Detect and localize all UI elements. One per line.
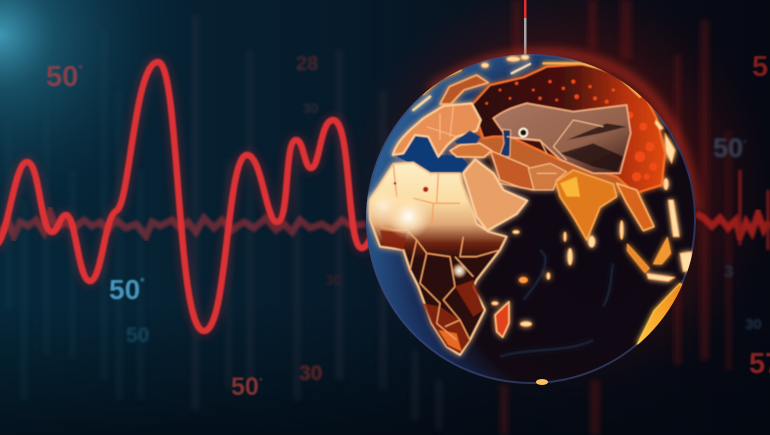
chart labels: blurred scale numbers: 3 — [724, 262, 733, 281]
main red pulse line — [0, 62, 374, 331]
noisy baseline: right — [696, 214, 770, 236]
land: Africa — [370, 163, 507, 355]
land: central Asia and China — [493, 103, 631, 173]
chart labels: blurred scale numbers: ° — [78, 64, 83, 76]
land: India — [556, 170, 617, 240]
Europe and Asia borders — [427, 107, 603, 190]
globe glow — [430, 53, 695, 210]
land: Middle East and Iran — [491, 151, 534, 190]
chart labels: blurred scale numbers: 30 — [325, 272, 342, 289]
chart labels: blurred scale numbers: 30 — [745, 316, 762, 333]
chart labels: blurred scale numbers: 28 — [296, 53, 318, 75]
land: Russia and Siberia — [472, 64, 665, 193]
land: Caspian Sea — [499, 129, 511, 157]
Mediterranean Sea — [393, 133, 468, 175]
ember speckles over Russia — [485, 80, 657, 181]
land: Arabia — [463, 159, 527, 231]
islands: bright fragments — [481, 55, 693, 326]
chart labels: blurred scale numbers: 50 — [46, 61, 78, 93]
chart labels: blurred scale numbers: ° — [259, 376, 263, 386]
shadows across Tibet — [560, 123, 627, 172]
south pole ember — [536, 379, 548, 385]
Madagascar — [495, 302, 509, 337]
East Africa flare — [451, 263, 467, 279]
land: Anatolia — [450, 143, 492, 157]
chart labels: blurred scale numbers — [46, 51, 770, 401]
Africa hot red zones — [380, 230, 483, 353]
noisy baseline: left — [0, 212, 366, 236]
chart labels: blurred scale numbers: 50 — [126, 324, 149, 347]
land: Indochina — [617, 183, 654, 231]
Sahara markers — [394, 182, 428, 192]
Indian Ocean cloud wisps — [500, 250, 613, 357]
Aral marker — [518, 128, 528, 138]
chart labels: blurred scale numbers: 50 — [231, 373, 259, 401]
India highlights — [560, 177, 580, 197]
Sahara hot spot — [389, 198, 428, 238]
chart labels: blurred scale numbers: 5 — [752, 51, 768, 83]
land: Europe — [393, 103, 481, 157]
chart labels: blurred scale numbers: ° — [140, 277, 145, 289]
hanging pin above globe — [524, 0, 526, 54]
chart labels: blurred scale numbers: ° — [743, 138, 747, 148]
globe — [363, 54, 696, 385]
Arctic and coastal glow arcs — [413, 63, 640, 110]
map: continents and islands — [363, 55, 693, 357]
land: Pakistan and Afghanistan — [528, 163, 567, 190]
chart labels: blurred scale numbers: 30 — [299, 362, 322, 385]
land: Scandinavia — [440, 75, 488, 104]
Australia — [637, 283, 686, 344]
land: Black Sea — [454, 131, 481, 144]
land: Eurasia base — [452, 128, 622, 196]
chart labels: blurred scale numbers: 50 — [109, 274, 140, 305]
chart labels: blurred scale numbers: 30 — [303, 100, 319, 116]
Africa country borders — [380, 164, 500, 340]
chart labels: blurred scale numbers: 50 — [713, 133, 743, 163]
thin spike lines: right — [740, 170, 768, 250]
